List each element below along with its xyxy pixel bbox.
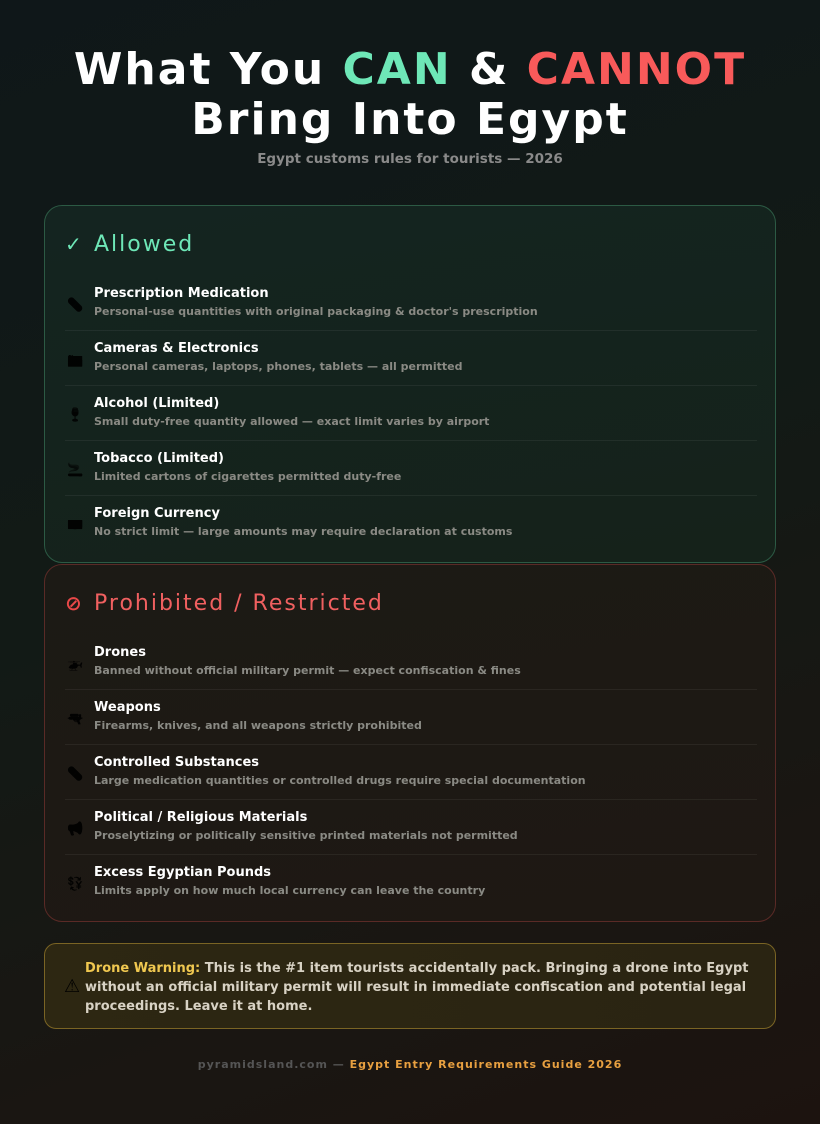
item: alcohol: 🍷 [67, 408, 83, 423]
subtitle: Egypt customs rules for tourists — 2026 [257, 151, 563, 167]
item: medication [65, 276, 757, 331]
title: What You CAN & CANNOT [74, 44, 746, 95]
item: tobacco: 🚬 [67, 463, 83, 478]
heading: allowed: Allowed [94, 232, 194, 257]
item: currency: No strict limit — large amounts may require declaration at customs [94, 525, 512, 538]
item: medication: Prescription Medication [94, 286, 269, 301]
item: substances: 💊 [67, 767, 83, 782]
item: alcohol: Small duty-free quantity allowed — exact limit varies by airport [94, 415, 489, 428]
heading: prohibited: Prohibited / Restricted [94, 591, 384, 616]
item: drones: Drones [94, 645, 146, 660]
item: pounds: Limits apply on how much local currency can leave the country [94, 884, 485, 897]
warning text: Drone Warning: This is the #1 item tourists accidentally pack. Bringing a drone into Egypt without an official military permit will result in immediate confiscation and potential legal proceedings. Leave it at home. [85, 961, 748, 1014]
item: alcohol [65, 386, 757, 441]
item: substances: Large medication quantities or controlled drugs require special documentation [94, 774, 586, 787]
item: drones: Banned without official military permit — expect confiscation & fines [94, 664, 521, 677]
item: weapons [65, 690, 757, 745]
item: currency: 💵 [67, 518, 83, 533]
item: materials [65, 800, 757, 855]
item: pounds: Excess Egyptian Pounds [94, 865, 271, 880]
heading: prohibited: ⊘ [65, 591, 82, 615]
item: drones: 🚁 [67, 657, 83, 672]
item: cameras: Personal cameras, laptops, phones, tablets — all permitted [94, 360, 462, 373]
icon: warning: ⚠ [64, 976, 80, 997]
item: tobacco: Limited cartons of cigarettes permitted duty-free [94, 470, 401, 483]
item: weapons: 🔫 [67, 712, 83, 727]
panel: allowed [44, 205, 776, 563]
callout: drone warning [44, 943, 776, 1029]
item: alcohol: Alcohol (Limited) [94, 396, 219, 411]
item: pounds [67, 865, 485, 897]
item: materials: 📢 [67, 822, 83, 837]
item: medication: 💊 [67, 298, 83, 313]
item: cameras [65, 331, 757, 386]
item: materials: Political / Religious Materials [94, 810, 307, 825]
heading: allowed: ✓ [65, 232, 82, 256]
item: weapons: Weapons [94, 700, 161, 715]
item: weapons: Firearms, knives, and all weapons strictly prohibited [94, 719, 422, 732]
item: tobacco: Tobacco (Limited) [94, 451, 224, 466]
footer: pyramidsland.com — Egypt Entry Requirements Guide 2026 [198, 1058, 622, 1071]
item: currency: Foreign Currency [94, 506, 220, 521]
item: pounds: 💱 [67, 877, 83, 892]
item: substances [65, 745, 757, 800]
title [74, 44, 746, 145]
item: medication: Personal-use quantities with original packaging & doctor's prescription [94, 305, 538, 318]
title: Bring Into Egypt [191, 94, 629, 145]
item: currency [67, 506, 512, 538]
item: drones [65, 635, 757, 690]
item: cameras: 📷 [67, 353, 83, 368]
item: tobacco [65, 441, 757, 496]
panel: prohibited [44, 564, 776, 922]
item: materials: Proselytizing or politically sensitive printed materials not permitted [94, 829, 518, 842]
item: cameras: Cameras & Electronics [94, 341, 259, 356]
item: substances: Controlled Substances [94, 755, 259, 770]
